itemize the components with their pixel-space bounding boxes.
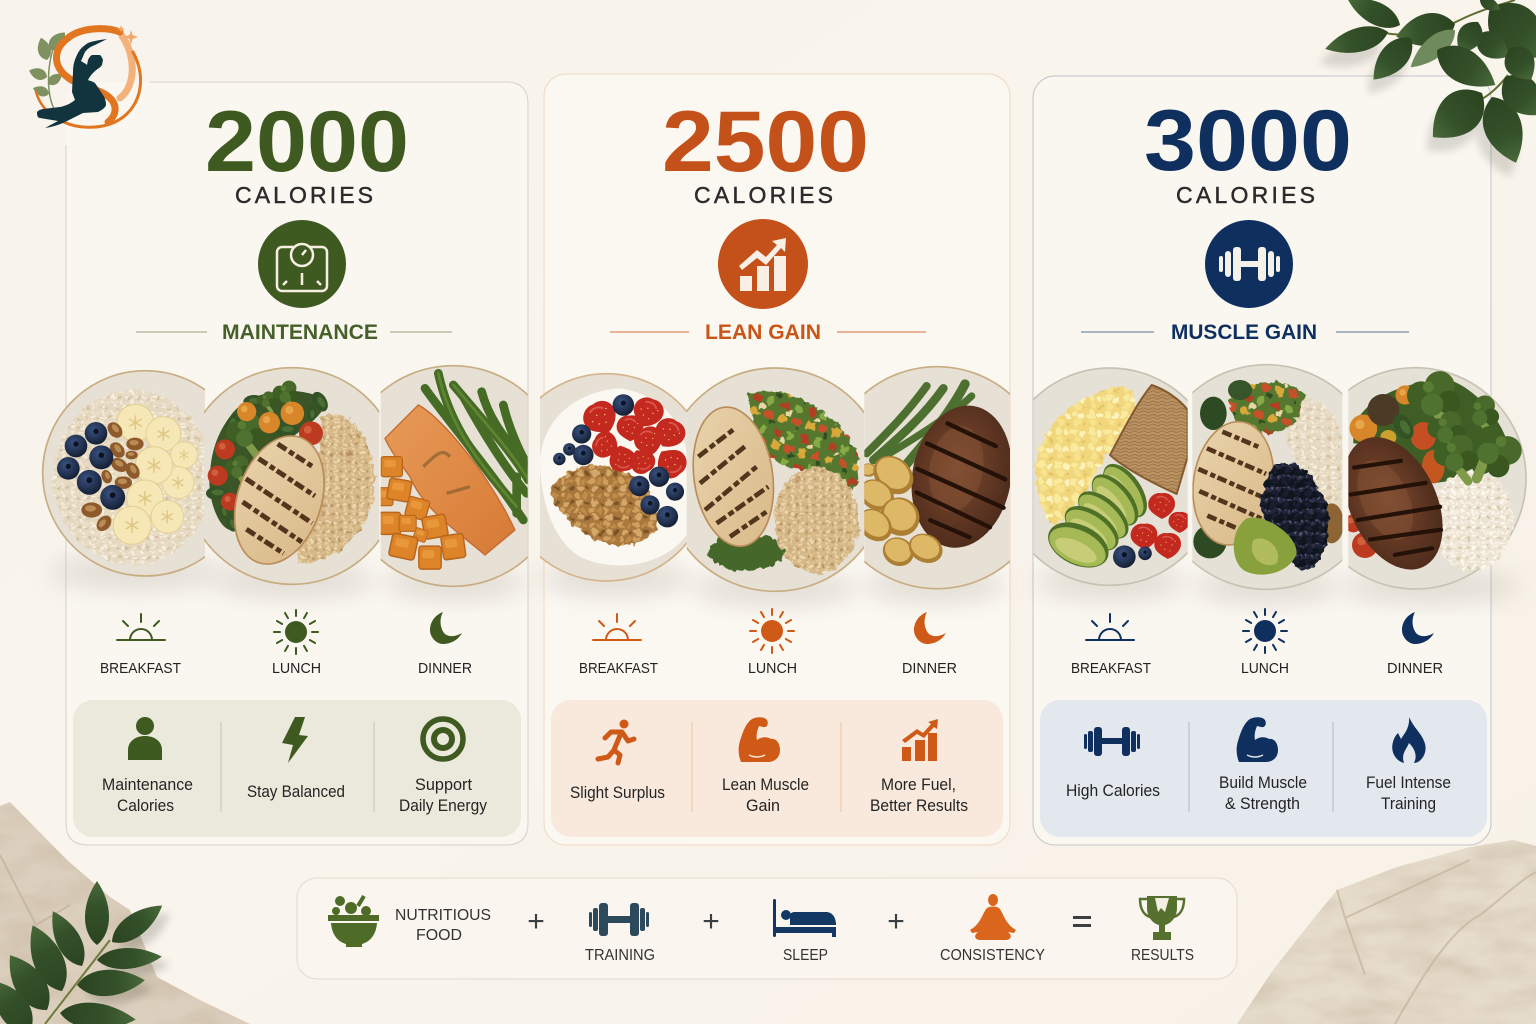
calorie number: 2500: [662, 94, 869, 190]
logo figure: [37, 39, 107, 128]
equation bar: [297, 878, 1237, 979]
dinner: [902, 612, 957, 677]
nutritious food text: FOOD: [416, 927, 462, 944]
icon: runner: [598, 720, 634, 763]
panel: lean gain: [540, 74, 1010, 846]
benefit text: Calories: [117, 797, 174, 815]
benefits box: [1040, 700, 1487, 837]
lunch: [272, 610, 321, 677]
benefit text: & Strength: [1225, 795, 1300, 813]
benefit text: Support: [415, 776, 472, 794]
lunch: LUNCH: [1241, 661, 1289, 677]
calories label: CALORIES: [694, 182, 833, 208]
sleep label: SLEEP: [783, 947, 828, 964]
lunch: [1241, 609, 1289, 677]
icon: dumbbell: [1084, 727, 1140, 756]
nutritious food text: [395, 907, 491, 944]
plate: chicken, vegetables and rice: [204, 366, 380, 586]
calories label: CALORIES: [235, 182, 373, 208]
panel frame: [66, 82, 528, 845]
benefit text: High Calories: [1066, 782, 1160, 800]
shadows under plates: [540, 560, 1005, 606]
icon: person: [128, 717, 162, 760]
benefit text: Training: [1381, 795, 1436, 813]
benefit text: More Fuel,: [881, 776, 956, 794]
icon: growth chart: [902, 719, 938, 761]
towel: bottom right: [1237, 840, 1536, 1024]
benefit text: Better Results: [870, 797, 968, 815]
plus: +: [527, 905, 545, 938]
towel: bottom left: [0, 802, 250, 1024]
plate: salmon, green beans and sweet potato: [380, 364, 528, 588]
benefit text: [722, 776, 809, 815]
benefit text: [870, 776, 968, 815]
dinner: DINNER: [1387, 661, 1443, 677]
logo sparkles: [117, 25, 138, 45]
equals: [1073, 916, 1091, 927]
benefit text: [102, 776, 193, 815]
benefit text: Build Muscle: [1219, 774, 1307, 792]
dinner: DINNER: [902, 661, 957, 677]
meal icons and labels: [1071, 609, 1443, 677]
icon: dumbbell: [1205, 220, 1293, 308]
icon: lightning bolt: [282, 717, 308, 763]
dinner: [1387, 612, 1443, 677]
benefit text: Fuel Intense: [1366, 774, 1451, 792]
benefit text: Gain: [746, 797, 780, 815]
panel: muscle gain: [1001, 76, 1530, 845]
icon: flexed arm: [1237, 717, 1278, 762]
icon: salad bowl: [328, 896, 379, 947]
benefit text: Maintenance: [102, 776, 193, 794]
plate: chicken, black beans, avocado and rice: [1192, 364, 1342, 590]
icon: flame: [1392, 717, 1426, 763]
plate: steak, potatoes and asparagus: [864, 366, 1010, 590]
training label: TRAINING: [585, 947, 655, 964]
benefits box: [551, 700, 1003, 837]
icon: target: [423, 719, 463, 759]
icon: growth chart: [718, 219, 808, 309]
meal icons and labels: [100, 610, 472, 677]
icon: scale: [258, 220, 346, 308]
icon: meditating person: [970, 894, 1016, 940]
benefit text: [1366, 774, 1451, 813]
meal icons and labels: [579, 609, 957, 677]
plate: chicken, salad and quinoa: [686, 367, 864, 592]
breakfast: BREAKFAST: [100, 661, 181, 677]
benefit text: Slight Surplus: [570, 784, 665, 802]
plus: +: [887, 905, 905, 938]
panel: maintenance: [43, 82, 563, 845]
icon: dumbbell: [589, 903, 649, 936]
logo: [27, 25, 141, 128]
shadows under plates: [1035, 564, 1518, 604]
logo leaves: [27, 28, 70, 118]
breakfast: [1071, 614, 1151, 677]
breakfast: [100, 614, 181, 677]
breakfast: BREAKFAST: [1071, 661, 1151, 677]
icon: trophy: [1140, 896, 1184, 940]
plate: oatmeal breakfast: [42, 370, 205, 577]
nutritious food text: NUTRITIOUS: [395, 907, 491, 924]
benefit text: Daily Energy: [399, 797, 488, 815]
panel frame: [1033, 76, 1491, 845]
goal heading: MAINTENANCE: [222, 321, 378, 344]
breakfast: [579, 614, 658, 677]
goal heading: LEAN GAIN: [705, 321, 821, 344]
lunch: [748, 609, 797, 677]
lunch: LUNCH: [748, 661, 797, 677]
breakfast: BREAKFAST: [579, 661, 658, 677]
leaves: top right: [1316, 0, 1536, 183]
benefit text: [1219, 774, 1307, 813]
shadows under plates: [50, 554, 525, 600]
plate: steak, broccoli and rice: [1348, 366, 1527, 590]
plate: eggs, toast, avocado and berries: [1033, 367, 1188, 586]
consistency label: CONSISTENCY: [940, 947, 1045, 964]
calorie number: 3000: [1144, 93, 1352, 189]
leaves: bottom left: [0, 881, 177, 1024]
dinner: [418, 612, 472, 677]
logo swoosh: [36, 29, 141, 127]
icon: flexed arm: [739, 717, 780, 762]
plus: +: [702, 905, 720, 938]
calories label: CALORIES: [1176, 182, 1315, 208]
panel frame: [544, 74, 1010, 845]
dinner: DINNER: [418, 661, 472, 677]
results label: RESULTS: [1131, 947, 1194, 964]
benefit text: Stay Balanced: [247, 783, 345, 801]
goal heading: MUSCLE GAIN: [1171, 321, 1317, 344]
plate: yogurt, berries and granola: [540, 372, 687, 582]
calorie number: 2000: [205, 94, 409, 190]
lunch: LUNCH: [272, 661, 321, 677]
benefits box: [73, 700, 521, 837]
benefit text: Lean Muscle: [722, 776, 809, 794]
benefit text: [399, 776, 488, 815]
icon: bed: [773, 899, 836, 937]
